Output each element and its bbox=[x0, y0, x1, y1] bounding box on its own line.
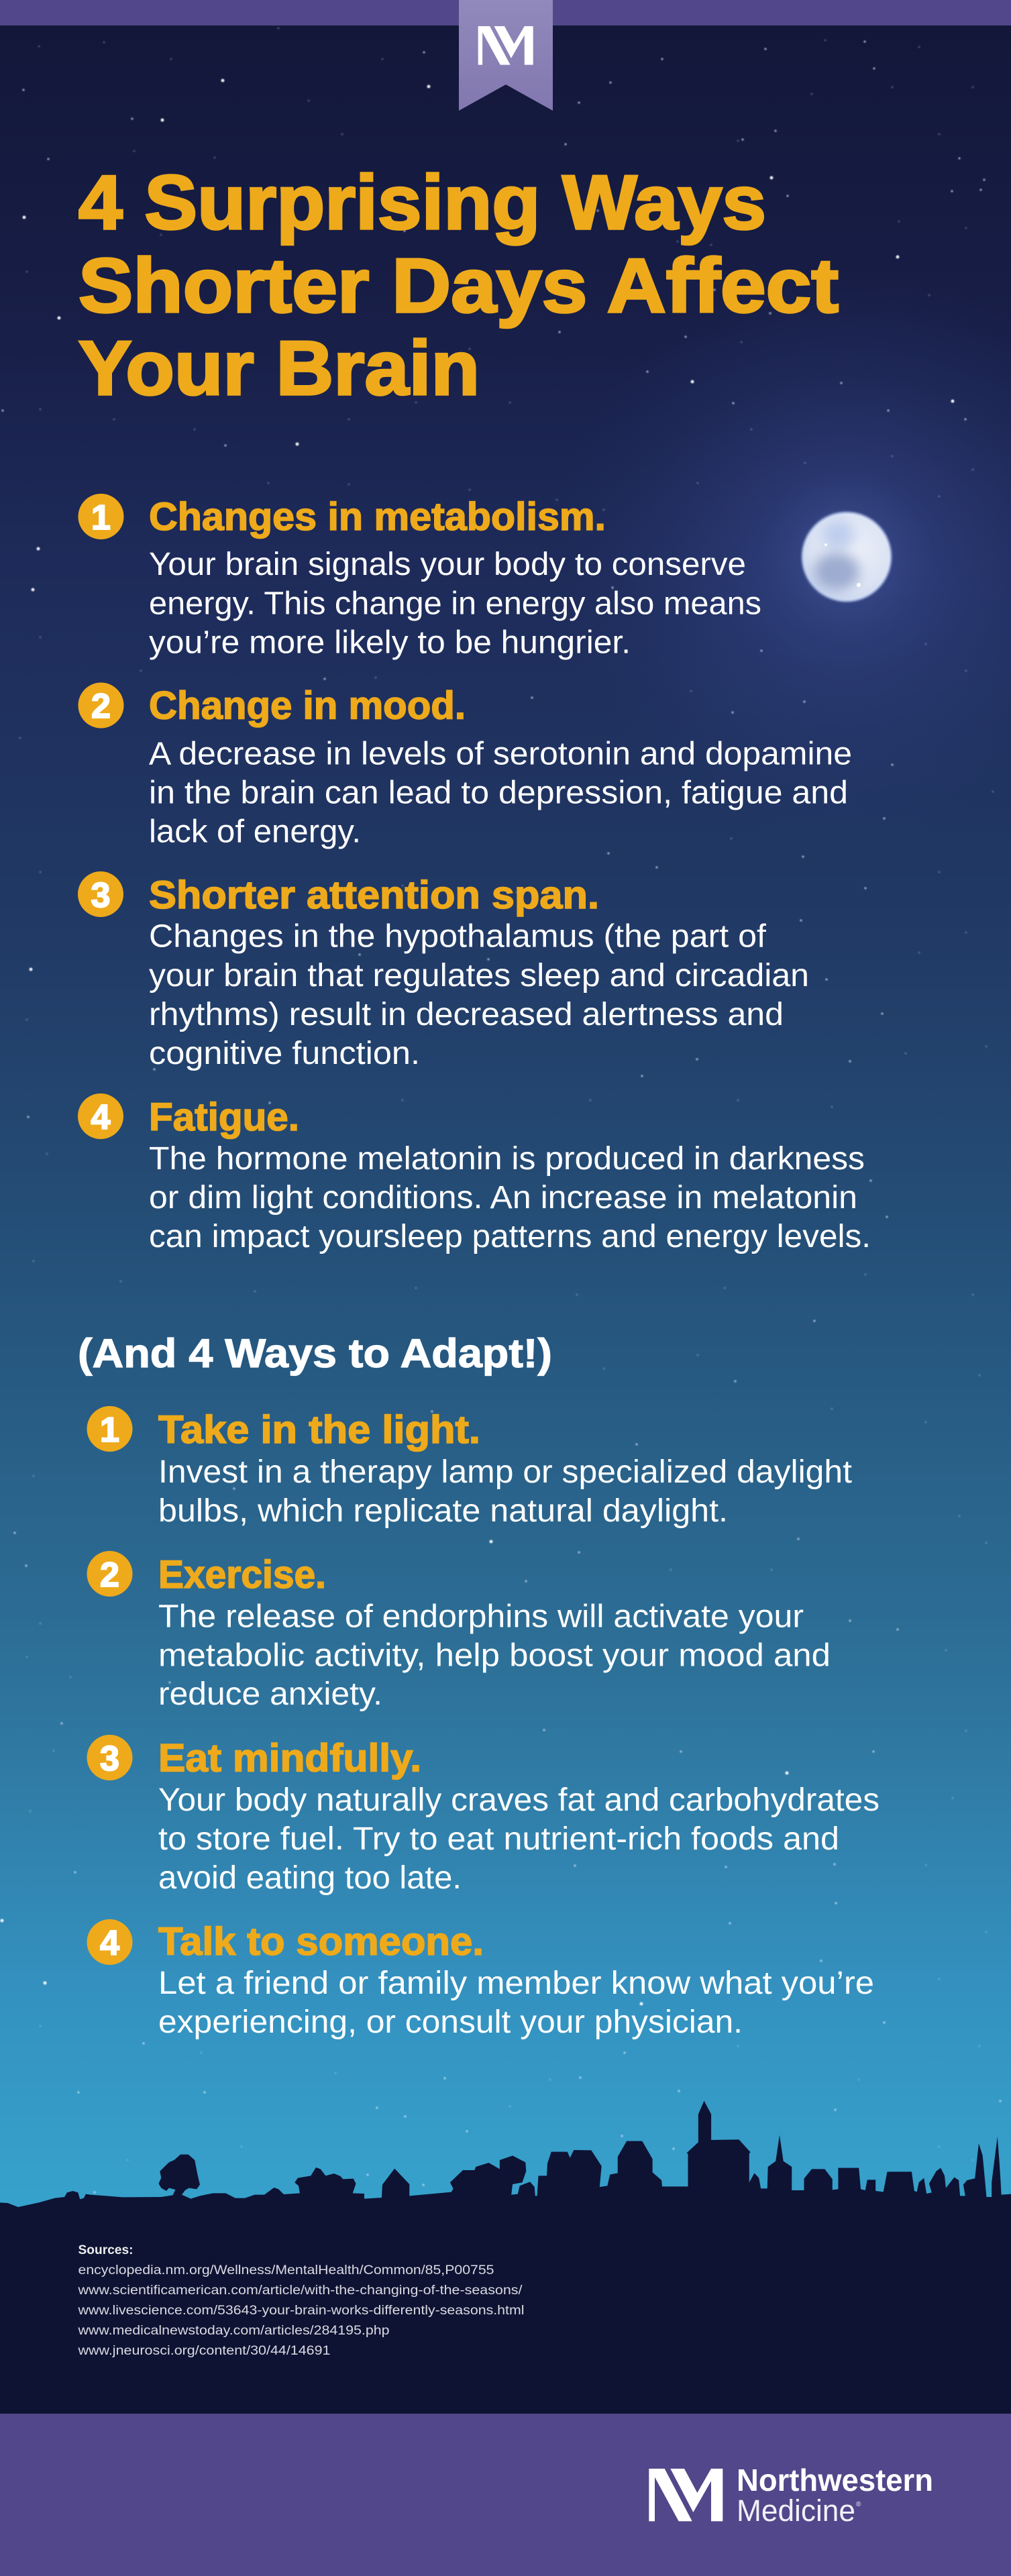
body text: lack of energy. bbox=[149, 813, 361, 849]
body text bbox=[149, 735, 852, 849]
footer bar bbox=[0, 2414, 1011, 2576]
body text: reduce anxiety. bbox=[158, 1676, 382, 1712]
body text: you’re more likely to be hungrier. bbox=[149, 624, 631, 660]
subheading: ways to adapt: (And 4 Ways to Adapt!) bbox=[78, 1331, 552, 1376]
body text: your brain that regulates sleep and circadian bbox=[149, 957, 809, 994]
sources list: Sources: bbox=[78, 2243, 133, 2257]
Northwestern Medicine logo: ® bbox=[856, 2501, 861, 2508]
body text: Changes in the hypothalamus (the part of bbox=[149, 918, 767, 954]
body text: Let a friend or family member know what you’re bbox=[158, 1965, 874, 2001]
body text: bulbs, which replicate natural daylight. bbox=[158, 1493, 728, 1529]
sources list: www.jneurosci.org/content/30/44/14691 bbox=[77, 2344, 330, 2358]
body text bbox=[158, 1782, 880, 1896]
panel: way 2 mood bbox=[78, 683, 852, 849]
heading: Eat mindfully. bbox=[158, 1736, 421, 1780]
sources list: encyclopedia.nm.org/Wellness/MentalHealth/Common/85,P00755 bbox=[78, 2263, 494, 2277]
body text bbox=[158, 1454, 853, 1529]
Northwestern Medicine logo bbox=[649, 2463, 933, 2528]
sources list: www.medicalnewstoday.com/articles/284195.php bbox=[77, 2324, 390, 2338]
body text bbox=[149, 546, 761, 660]
panel: adapt 4 talk bbox=[87, 1919, 874, 2040]
body text: A decrease in levels of serotonin and dopamine bbox=[149, 735, 852, 771]
body text bbox=[149, 1140, 871, 1254]
number badge 4 bbox=[87, 1919, 133, 1965]
number badge 3: 3 bbox=[91, 876, 110, 915]
number badge 3 bbox=[78, 871, 123, 917]
number badge 2: 2 bbox=[91, 687, 111, 726]
sources list: www.livescience.com/53643-your-brain-works-differently-seasons.html bbox=[77, 2304, 525, 2318]
number badge 4: 4 bbox=[100, 1924, 119, 1963]
body text: Your brain signals your body to conserve bbox=[149, 546, 746, 582]
body text: can impact yoursleep patterns and energy levels. bbox=[149, 1218, 871, 1254]
heading: Take in the light. bbox=[158, 1408, 480, 1452]
number badge 1 bbox=[87, 1406, 133, 1452]
body text: Your body naturally craves fat and carbohydrates bbox=[158, 1782, 880, 1818]
heading: Talk to someone. bbox=[158, 1920, 484, 1964]
body text bbox=[158, 1965, 874, 2040]
moon bbox=[802, 512, 892, 602]
town skyline silhouette and dark sources band bbox=[0, 2101, 1011, 2415]
panel: adapt 1 light bbox=[87, 1406, 853, 1529]
panel: way 1 metabolism bbox=[78, 494, 761, 660]
heading: Fatigue. bbox=[149, 1095, 299, 1139]
number badge 4 bbox=[78, 1093, 123, 1139]
number badge 2 bbox=[78, 683, 123, 729]
body text: rhythms) result in decreased alertness and bbox=[149, 996, 784, 1032]
body text: or dim light conditions. An increase in melatonin bbox=[149, 1179, 857, 1216]
Northwestern Medicine logo: Northwestern bbox=[737, 2463, 933, 2498]
panel: adapt 3 eat bbox=[87, 1735, 880, 1896]
number badge 4: 4 bbox=[91, 1098, 111, 1137]
title: 4 Surprising Ways bbox=[78, 160, 766, 246]
panel: adapt 2 exercise bbox=[87, 1551, 831, 1712]
body text: in the brain can lead to depression, fatigue and bbox=[149, 774, 848, 810]
dim stars bbox=[20, 28, 993, 2160]
body text: Invest in a therapy lamp or specialized daylight bbox=[158, 1454, 853, 1490]
body text: experiencing, or consult your physician. bbox=[158, 2004, 743, 2040]
number badge 1: 1 bbox=[91, 498, 111, 537]
body text: metabolic activity, help boost your mood and bbox=[158, 1637, 831, 1673]
number badge 3: 3 bbox=[100, 1739, 119, 1778]
moon glow bbox=[550, 262, 1011, 852]
body text: The release of endorphins will activate your bbox=[158, 1598, 804, 1634]
Northwestern Medicine logo: Medicine bbox=[737, 2493, 855, 2528]
top purple bar bbox=[0, 0, 1011, 25]
title: Shorter Days Affect bbox=[78, 244, 839, 329]
body text: cognitive function. bbox=[149, 1035, 420, 1071]
body text bbox=[158, 1598, 831, 1712]
number badge 3 bbox=[87, 1735, 133, 1780]
title: Your Brain bbox=[78, 326, 480, 411]
number badge 1: 1 bbox=[100, 1411, 119, 1450]
body text bbox=[149, 918, 809, 1071]
body text: avoid eating too late. bbox=[158, 1860, 462, 1896]
number badge 2 bbox=[87, 1551, 133, 1597]
heading: Change in mood. bbox=[149, 684, 466, 727]
panel: way 4 fatigue bbox=[78, 1093, 871, 1254]
ribbon with monogram bbox=[459, 0, 553, 111]
heading: Exercise. bbox=[158, 1553, 326, 1597]
title bbox=[78, 160, 839, 411]
sources list: www.scientificamerican.com/article/with-the-changing-of-the-seasons/ bbox=[77, 2284, 523, 2298]
heading: Shorter attention span. bbox=[149, 873, 599, 917]
number badge 1 bbox=[78, 494, 123, 539]
heading: Changes in metabolism. bbox=[149, 495, 606, 539]
body text: The hormone melatonin is produced in darkness bbox=[149, 1140, 865, 1177]
body text: energy. This change in energy also means bbox=[149, 585, 761, 621]
bright stars bbox=[2, 80, 953, 2004]
panel: way 3 attention bbox=[78, 871, 809, 1071]
body text: to store fuel. Try to eat nutrient-rich foods and bbox=[158, 1821, 839, 1857]
sources list bbox=[77, 2243, 524, 2358]
number badge 2: 2 bbox=[100, 1556, 119, 1595]
